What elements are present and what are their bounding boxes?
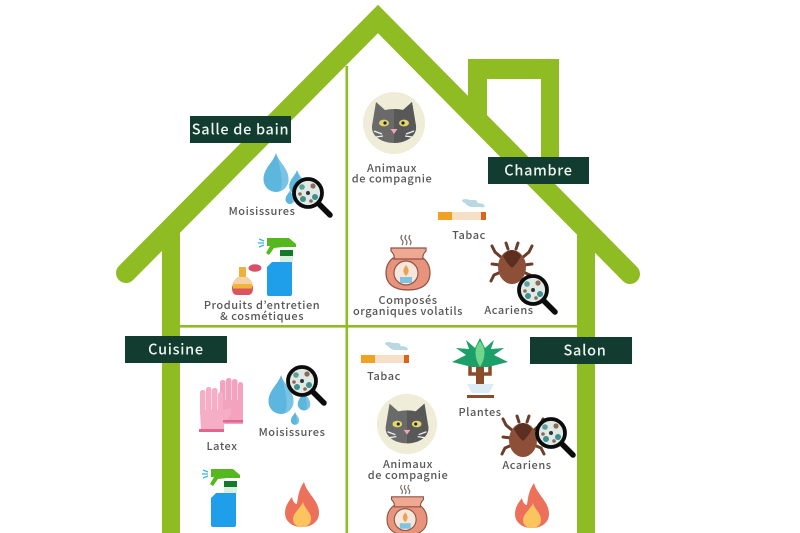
icon: acariens [502,416,573,457]
icon: chat [363,92,425,154]
heading: Salle de bain: Salle de bain [192,118,289,140]
icon: flamme [515,483,549,528]
icon: cigarette [438,199,486,220]
label: Tabac: Tabac [452,227,486,243]
vertical divider [346,66,348,533]
label: Tabac: Tabac [367,368,401,384]
heading: Chambre [488,157,589,184]
label: Produits d'entretien: Produits d’entretien [204,297,320,313]
icon: brûleur [386,235,430,290]
horizontal divider [180,325,577,328]
label: Acariens: Acariens [502,457,552,473]
icon: acariens [491,243,555,312]
heading: Salon: Salon [564,340,606,360]
house outline [126,19,630,533]
chimney [468,59,559,175]
label: Acariens: Acariens [484,302,534,318]
label: Composés organiques volatils: Composés [378,292,438,308]
icon: plante [452,338,508,398]
panel: salon [361,337,632,533]
left wall [162,225,180,533]
label: Animaux de compagnie: Animaux [383,456,433,472]
heading: Chambre: Chambre [504,160,573,180]
icon: gants [199,378,243,432]
panel: chambre [352,92,589,319]
panel: cuisine [125,336,325,527]
heading: Cuisine: Cuisine [148,338,204,360]
roof [126,19,630,274]
icon: spray [258,238,296,296]
label: Animaux de compagnie: de compagnie [368,467,448,483]
icon: brûleur [387,485,427,533]
right wall [577,225,595,533]
icon: cigarette [361,342,409,363]
icon: spray [202,469,240,527]
label: Animaux de compagnie: de compagnie [352,170,432,186]
label: Composés organiques volatils: organiques volatils [353,303,463,319]
label: Produits d'entretien: & cosmétiques [220,308,304,324]
panel: salle de bain [190,116,330,324]
label: Moisissures: Moisissures [259,424,325,440]
icon: chat [377,394,437,454]
label: Latex: Latex [206,438,238,454]
icon: parfum [232,264,262,295]
icon: moisissures [264,153,330,215]
heading: Salon [530,337,632,364]
icon: flamme [285,482,319,527]
label: Plantes: Plantes [458,404,502,420]
label: Animaux de compagnie: Animaux [367,160,417,176]
label: Moisissures: Moisissures [229,203,295,219]
heading: Cuisine [125,336,227,363]
icon: moisissures [268,367,324,425]
